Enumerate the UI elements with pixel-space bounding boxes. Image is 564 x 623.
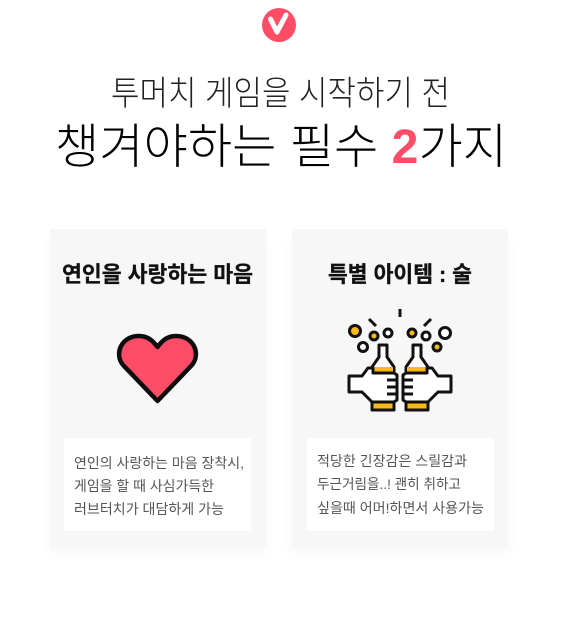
panel: lover's heart (50, 229, 266, 554)
panel: special item, alcohol (292, 229, 508, 554)
panel heading: 특별 아이템 : 술 (328, 262, 472, 287)
logo: red circle with check mark (262, 8, 296, 42)
text box: 러브터치가 대담하게 가능 (74, 501, 224, 517)
text box (307, 438, 494, 531)
text box (64, 438, 251, 531)
icon: heart (119, 336, 196, 401)
title (55, 75, 507, 174)
text box: 연인의 사랑하는 마음 장착시, (74, 455, 244, 471)
title line 2: 챙겨야하는 필수 2가지 (55, 121, 507, 174)
icon: clinking bottles (349, 309, 451, 410)
text box: 두근거림을..! 괜히 취하고 (317, 476, 461, 492)
text box: 적당한 긴장감은 스릴감과 (317, 453, 467, 469)
title line 1: 투머치 게임을 시작하기 전 (111, 75, 450, 113)
text box: 게임을 할 때 사심가득한 (74, 478, 214, 494)
panel heading: 연인을 사랑하는 마음 (62, 262, 253, 287)
text box: 싶을때 어머!하면서 사용가능 (317, 500, 484, 516)
